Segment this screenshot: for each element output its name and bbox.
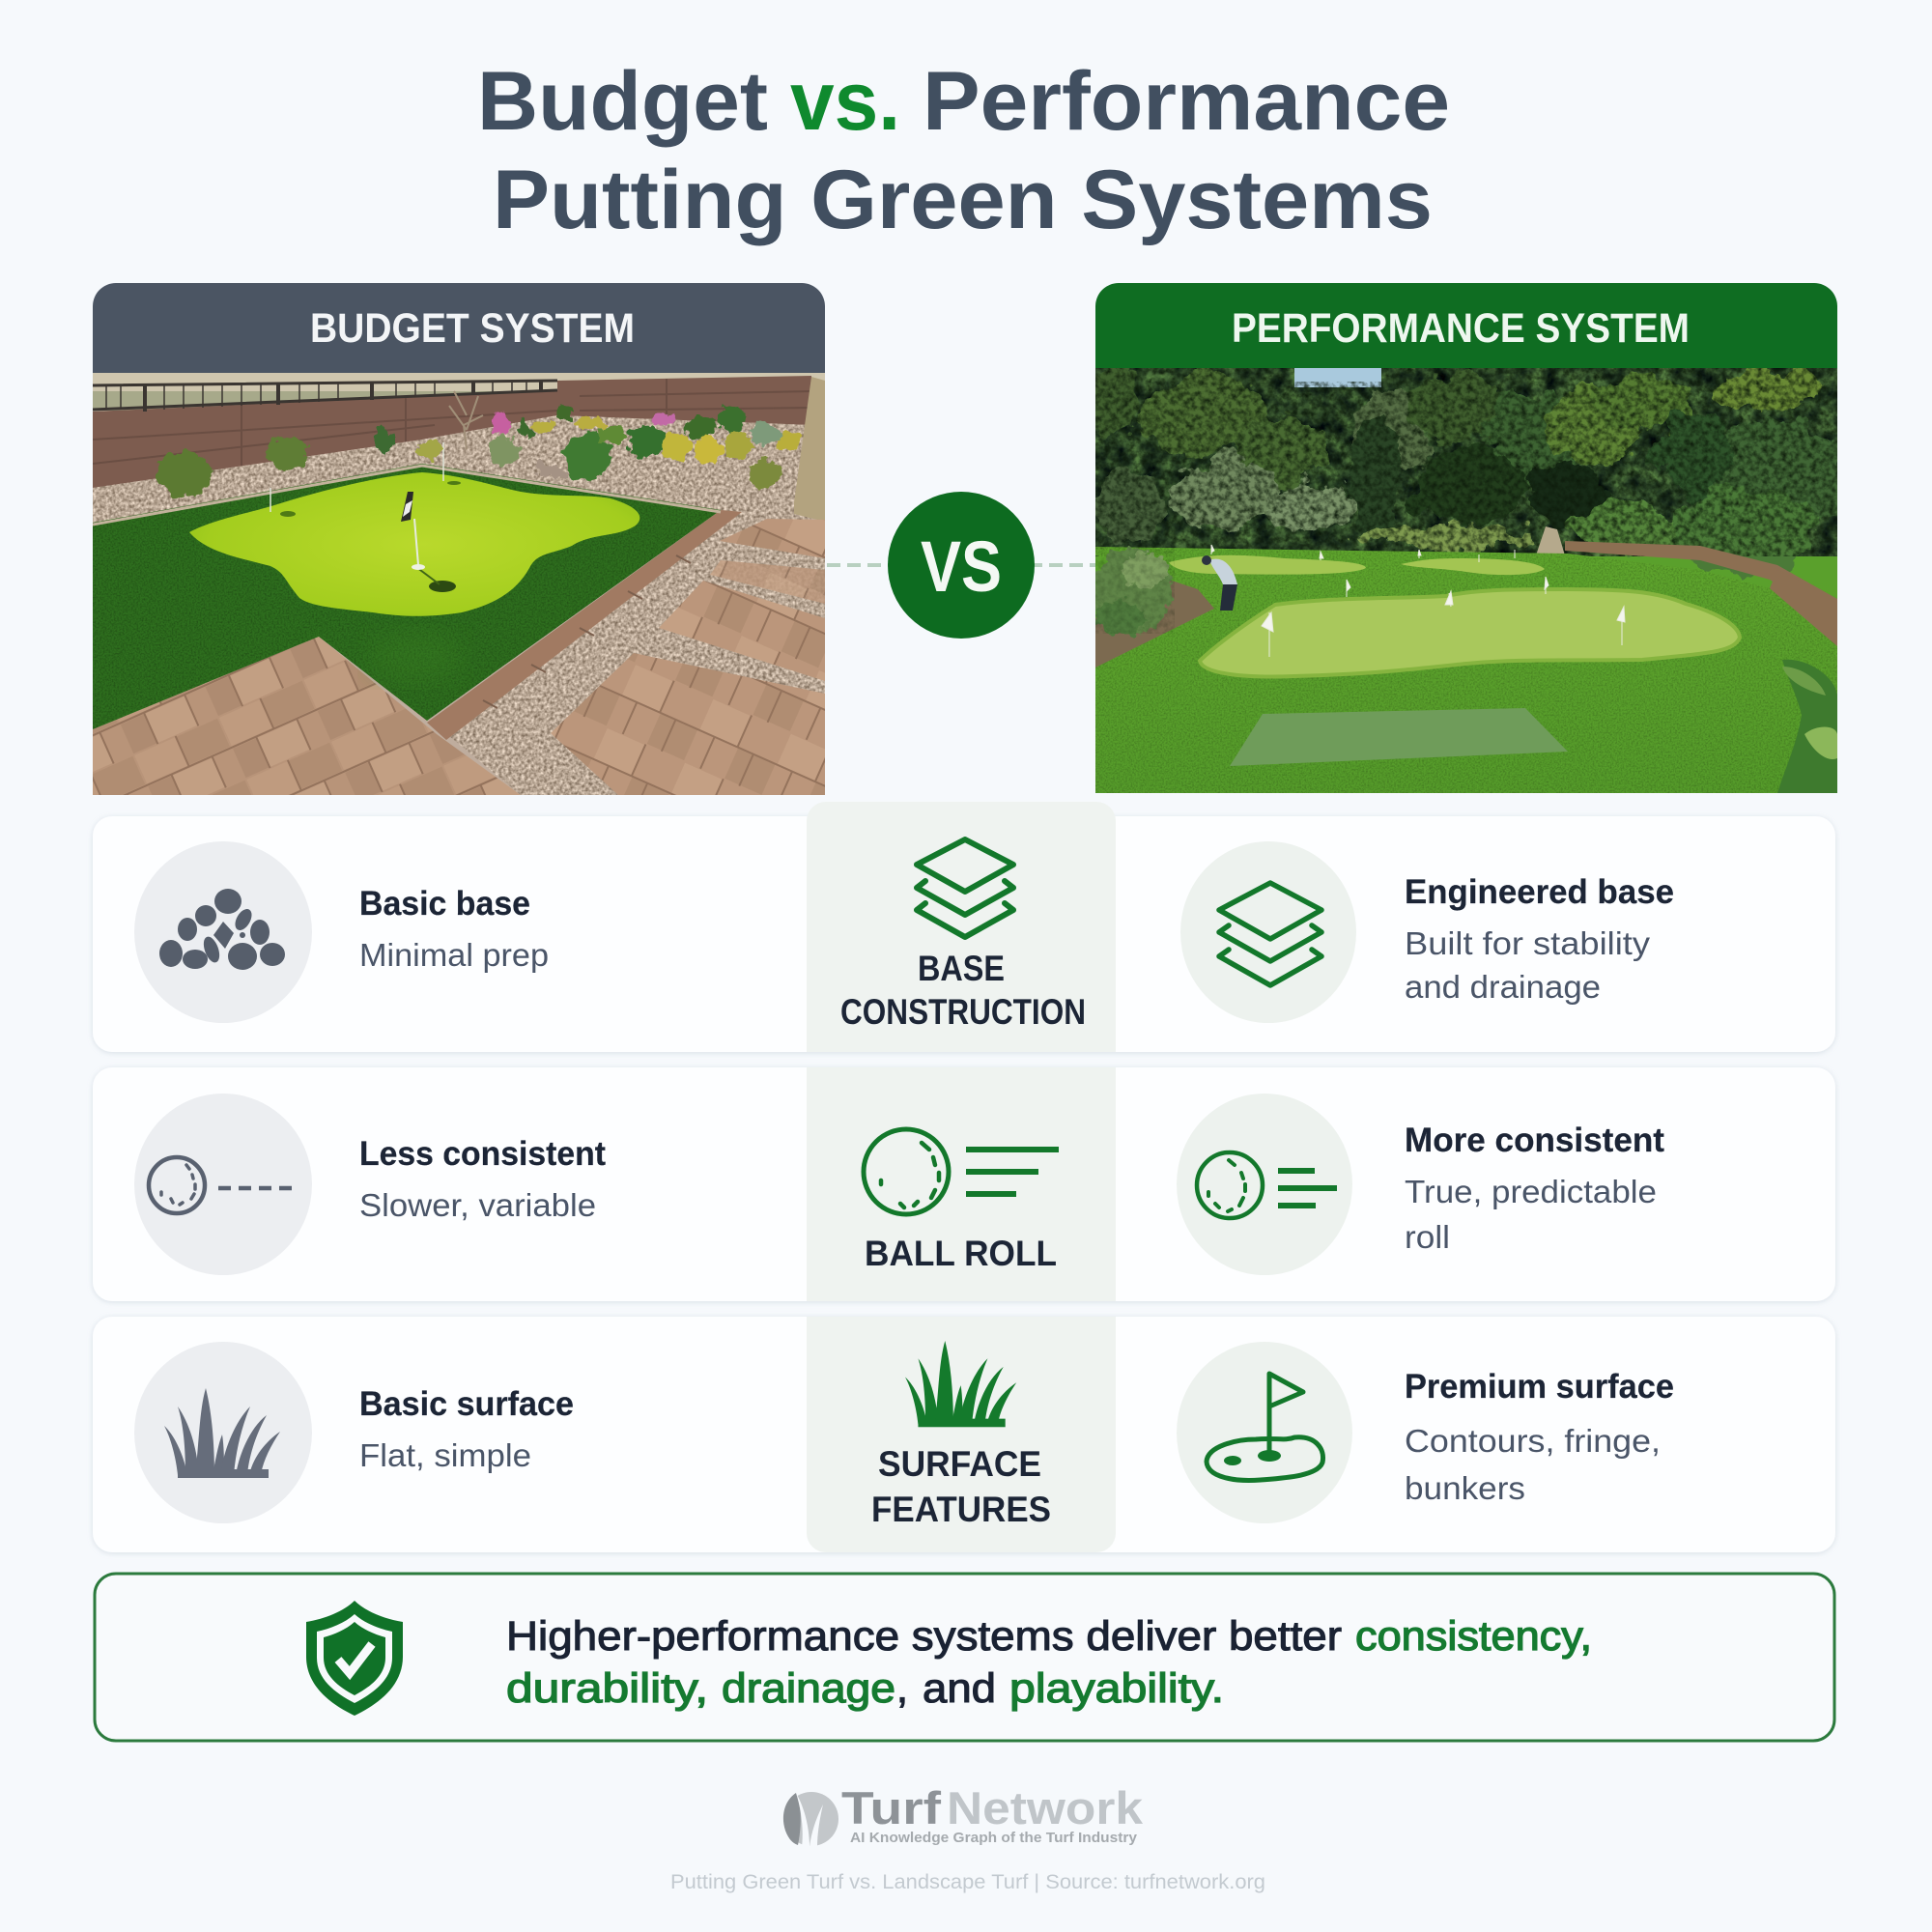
comparison row: surface features <box>93 1317 1835 1552</box>
takeaway text: and <box>923 1665 996 1712</box>
takeaway text: durability, <box>506 1665 708 1712</box>
label: BALL ROLL <box>865 1234 1057 1273</box>
header bar: performance system: PERFORMANCE SYSTEM <box>1232 305 1690 352</box>
wordmark <box>841 1782 1144 1846</box>
card <box>93 816 1835 1052</box>
label <box>871 1444 1051 1529</box>
panel: performance system photo card <box>1084 283 1842 793</box>
right side gravel <box>449 512 825 795</box>
logo: TurfNetwork <box>783 1782 1144 1847</box>
pavers <box>720 519 825 558</box>
takeaway text: consistency, <box>1355 1613 1592 1660</box>
text: Engineered base <box>1405 873 1674 911</box>
text: Contours, fringe, <box>1405 1423 1661 1459</box>
takeaway text: drainage <box>722 1665 895 1712</box>
text: Basic surface <box>359 1385 574 1423</box>
text <box>359 1135 606 1223</box>
text: Basic base <box>359 885 530 923</box>
title: vs. <box>790 55 900 148</box>
panel: budget system photo card <box>93 283 825 798</box>
wordmark: Network <box>947 1782 1144 1833</box>
wordmark: AI Knowledge Graph of the Turf Industry <box>850 1830 1138 1846</box>
takeaway text: Higher-performance systems deliver better <box>506 1613 1342 1660</box>
house corner <box>794 377 825 522</box>
connector: VS badge with dashes <box>827 492 1095 639</box>
gravel beds <box>93 415 811 522</box>
center column: surface features <box>807 1317 1116 1552</box>
performance side: premium surface <box>1177 1342 1674 1523</box>
golfer <box>1202 555 1237 611</box>
icon: stones <box>134 841 312 1023</box>
text: Minimal prep <box>359 937 549 973</box>
center column: base construction <box>807 802 1116 1052</box>
text: Premium surface <box>1405 1368 1674 1406</box>
title: Budget <box>477 55 768 148</box>
card <box>93 1067 1835 1301</box>
text: Slower, variable <box>359 1187 596 1223</box>
text: Less consistent <box>359 1135 606 1173</box>
header bar: performance system <box>1095 283 1837 368</box>
icon: flag on contoured green <box>1177 1342 1352 1523</box>
small greens <box>1169 555 1366 575</box>
comparison row: base construction <box>93 802 1835 1052</box>
main green <box>1200 589 1740 676</box>
mulch path <box>1536 526 1565 555</box>
text: roll <box>1405 1219 1450 1255</box>
icon: shield with check <box>306 1601 403 1716</box>
turf <box>1095 547 1706 572</box>
title: Putting Green Systems <box>493 154 1433 246</box>
icon: rolling ball <box>864 1129 1059 1214</box>
mulch right <box>1770 582 1837 646</box>
foliage lower right <box>1777 660 1837 793</box>
icon: layers <box>1180 841 1356 1023</box>
label <box>840 949 1086 1032</box>
takeaway text: playability. <box>1009 1665 1224 1712</box>
label: BASE <box>918 949 1005 988</box>
comparison row: ball roll <box>93 1067 1835 1301</box>
text: Built for stability <box>1405 925 1651 961</box>
performance side: engineered base <box>1180 841 1674 1023</box>
budget side: basic surface <box>134 1342 574 1523</box>
label: FEATURES <box>871 1490 1051 1529</box>
label: CONSTRUCTION <box>840 992 1086 1032</box>
budget side: basic base <box>134 841 549 1023</box>
bush left <box>1092 549 1173 636</box>
icon: green grass <box>905 1341 1016 1427</box>
text: True, predictable <box>1405 1174 1657 1209</box>
text <box>359 885 549 973</box>
icon: ball with dashed line <box>134 1094 312 1275</box>
takeaway text: , <box>896 1665 908 1712</box>
text: More consistent <box>1405 1122 1664 1159</box>
budget side: less consistent <box>134 1094 606 1275</box>
label: SURFACE <box>878 1444 1041 1484</box>
takeaway text <box>506 1613 1592 1712</box>
shrubs <box>155 406 801 497</box>
wordmark: Turf <box>841 1782 941 1833</box>
icon: turf leaf mark <box>783 1792 838 1847</box>
turf fringe <box>93 464 721 729</box>
title <box>477 55 1450 246</box>
text <box>1405 873 1674 1005</box>
performance side: more consistent <box>1177 1094 1664 1275</box>
icon: gray grass <box>134 1342 312 1523</box>
connector: VS badge with dashes: VS <box>921 526 1002 607</box>
icon: layers <box>917 839 1013 937</box>
border strip <box>427 510 742 740</box>
putting surface <box>189 472 639 616</box>
text: Flat, simple <box>359 1437 531 1473</box>
callout: takeaway <box>95 1574 1834 1741</box>
center column: ball roll <box>807 1067 1116 1301</box>
tree line <box>1095 368 1837 556</box>
text: bunkers <box>1405 1470 1525 1506</box>
text <box>1405 1122 1664 1255</box>
footer source line: Putting Green Turf vs. Landscape Turf | Source: turfnetwork.org <box>670 1871 1265 1893</box>
text: and drainage <box>1405 969 1601 1005</box>
flags <box>1211 545 1625 657</box>
flags and shadows <box>429 581 456 592</box>
header bar: budget system: BUDGET SYSTEM <box>310 305 635 352</box>
card <box>93 1317 1835 1552</box>
mulch left <box>1095 580 1214 668</box>
title: Performance <box>923 55 1450 148</box>
photo: performance backyard greens <box>1084 363 1842 793</box>
tee mat <box>1230 708 1568 766</box>
text <box>1405 1368 1674 1506</box>
photo: budget backyard putting green <box>93 373 825 798</box>
fence <box>93 381 557 412</box>
icon: ball with speed lines <box>1177 1094 1352 1275</box>
header bar: budget system <box>93 283 825 373</box>
text <box>359 1385 574 1473</box>
